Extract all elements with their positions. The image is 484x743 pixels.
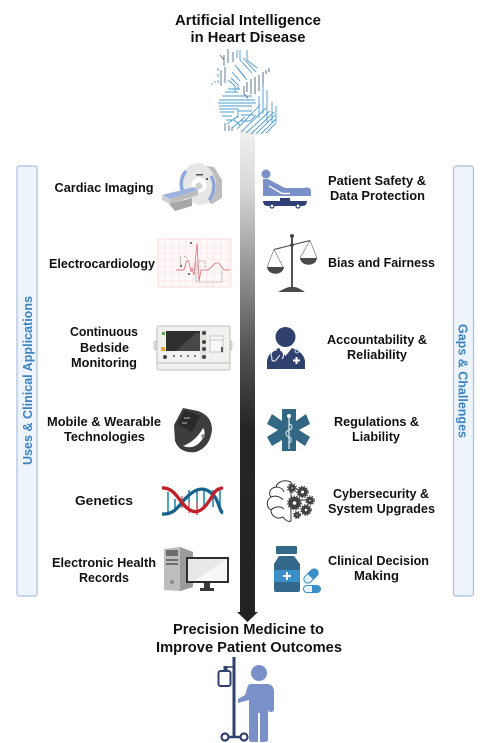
icon: desktop computer bbox=[164, 547, 228, 591]
icon: patient on bed bbox=[262, 170, 311, 208]
icon: star of life bbox=[267, 409, 310, 451]
icon: balance scales bbox=[267, 234, 317, 292]
label: mobile and wearable technologies: Technologies bbox=[64, 430, 145, 444]
central gradient arrow bbox=[237, 130, 258, 622]
label: continuous bedside monitoring: Monitoring bbox=[71, 356, 137, 370]
label: electronic health records: Records bbox=[79, 571, 129, 585]
label: clinical decision making: Making bbox=[354, 569, 399, 583]
label: accountability and reliability bbox=[327, 333, 427, 362]
label: regulations and liability: Liability bbox=[352, 430, 400, 444]
icon: MRI scanner bbox=[162, 160, 222, 211]
label: cybersecurity and system upgrades: Cybersecurity & bbox=[333, 487, 429, 501]
icon: smart watch bbox=[174, 408, 212, 452]
label: patient safety and data protection bbox=[328, 174, 426, 203]
panel: uses and clinical applications bbox=[17, 166, 37, 596]
label: continuous bedside monitoring: Bedside bbox=[80, 341, 129, 355]
icon: patient with IV drip bbox=[218, 657, 274, 742]
label: continuous bedside monitoring: Continuous bbox=[70, 325, 138, 339]
panel: gaps and challenges bbox=[454, 166, 474, 596]
label: cybersecurity and system upgrades: System Upgrades bbox=[328, 502, 435, 516]
label: clinical decision making: Clinical Decision bbox=[328, 554, 429, 568]
label: accountability and reliability: Reliability bbox=[347, 348, 407, 362]
label: genetics: Genetics bbox=[75, 494, 133, 508]
panel: uses and clinical applications: Uses & Clinical Applications bbox=[21, 296, 35, 465]
title bbox=[175, 13, 321, 46]
label: patient safety and data protection: Patient Safety & bbox=[328, 174, 426, 188]
label: regulations and liability bbox=[334, 415, 419, 444]
icon: medicine bottle and pills bbox=[274, 546, 321, 593]
label: electronic health records bbox=[52, 556, 156, 585]
icon: ECG chart bbox=[158, 239, 231, 287]
label: mobile and wearable technologies: Mobile & Wearable bbox=[47, 415, 161, 429]
icon: doctor bbox=[267, 327, 305, 369]
label: patient safety and data protection: Data Protection bbox=[330, 189, 425, 203]
title: in Heart Disease bbox=[190, 30, 306, 46]
label: cybersecurity and system upgrades bbox=[328, 487, 435, 516]
icon: bedside monitor bbox=[154, 326, 232, 370]
icon: circuit heart bbox=[212, 49, 276, 134]
icon: brain with gears bbox=[267, 481, 314, 521]
label: cardiac imaging: Cardiac Imaging bbox=[54, 181, 154, 195]
label: electronic health records: Electronic Health bbox=[52, 556, 156, 570]
label: bias and fairness: Bias and Fairness bbox=[328, 256, 435, 270]
title: Artificial Intelligence bbox=[175, 13, 321, 29]
icon: DNA helix bbox=[162, 488, 223, 515]
label: clinical decision making bbox=[328, 554, 429, 583]
conclusion heading: Precision Medicine to bbox=[173, 622, 324, 638]
conclusion heading: Improve Patient Outcomes bbox=[156, 640, 342, 656]
label: continuous bedside monitoring bbox=[70, 325, 138, 370]
label: regulations and liability: Regulations & bbox=[334, 415, 419, 429]
label: mobile and wearable technologies bbox=[47, 415, 161, 444]
label: accountability and reliability: Accountability & bbox=[327, 333, 427, 347]
label: electrocardiology: Electrocardiology bbox=[49, 257, 155, 271]
conclusion heading bbox=[156, 622, 342, 656]
panel: gaps and challenges: Gaps & Challenges bbox=[456, 324, 470, 438]
